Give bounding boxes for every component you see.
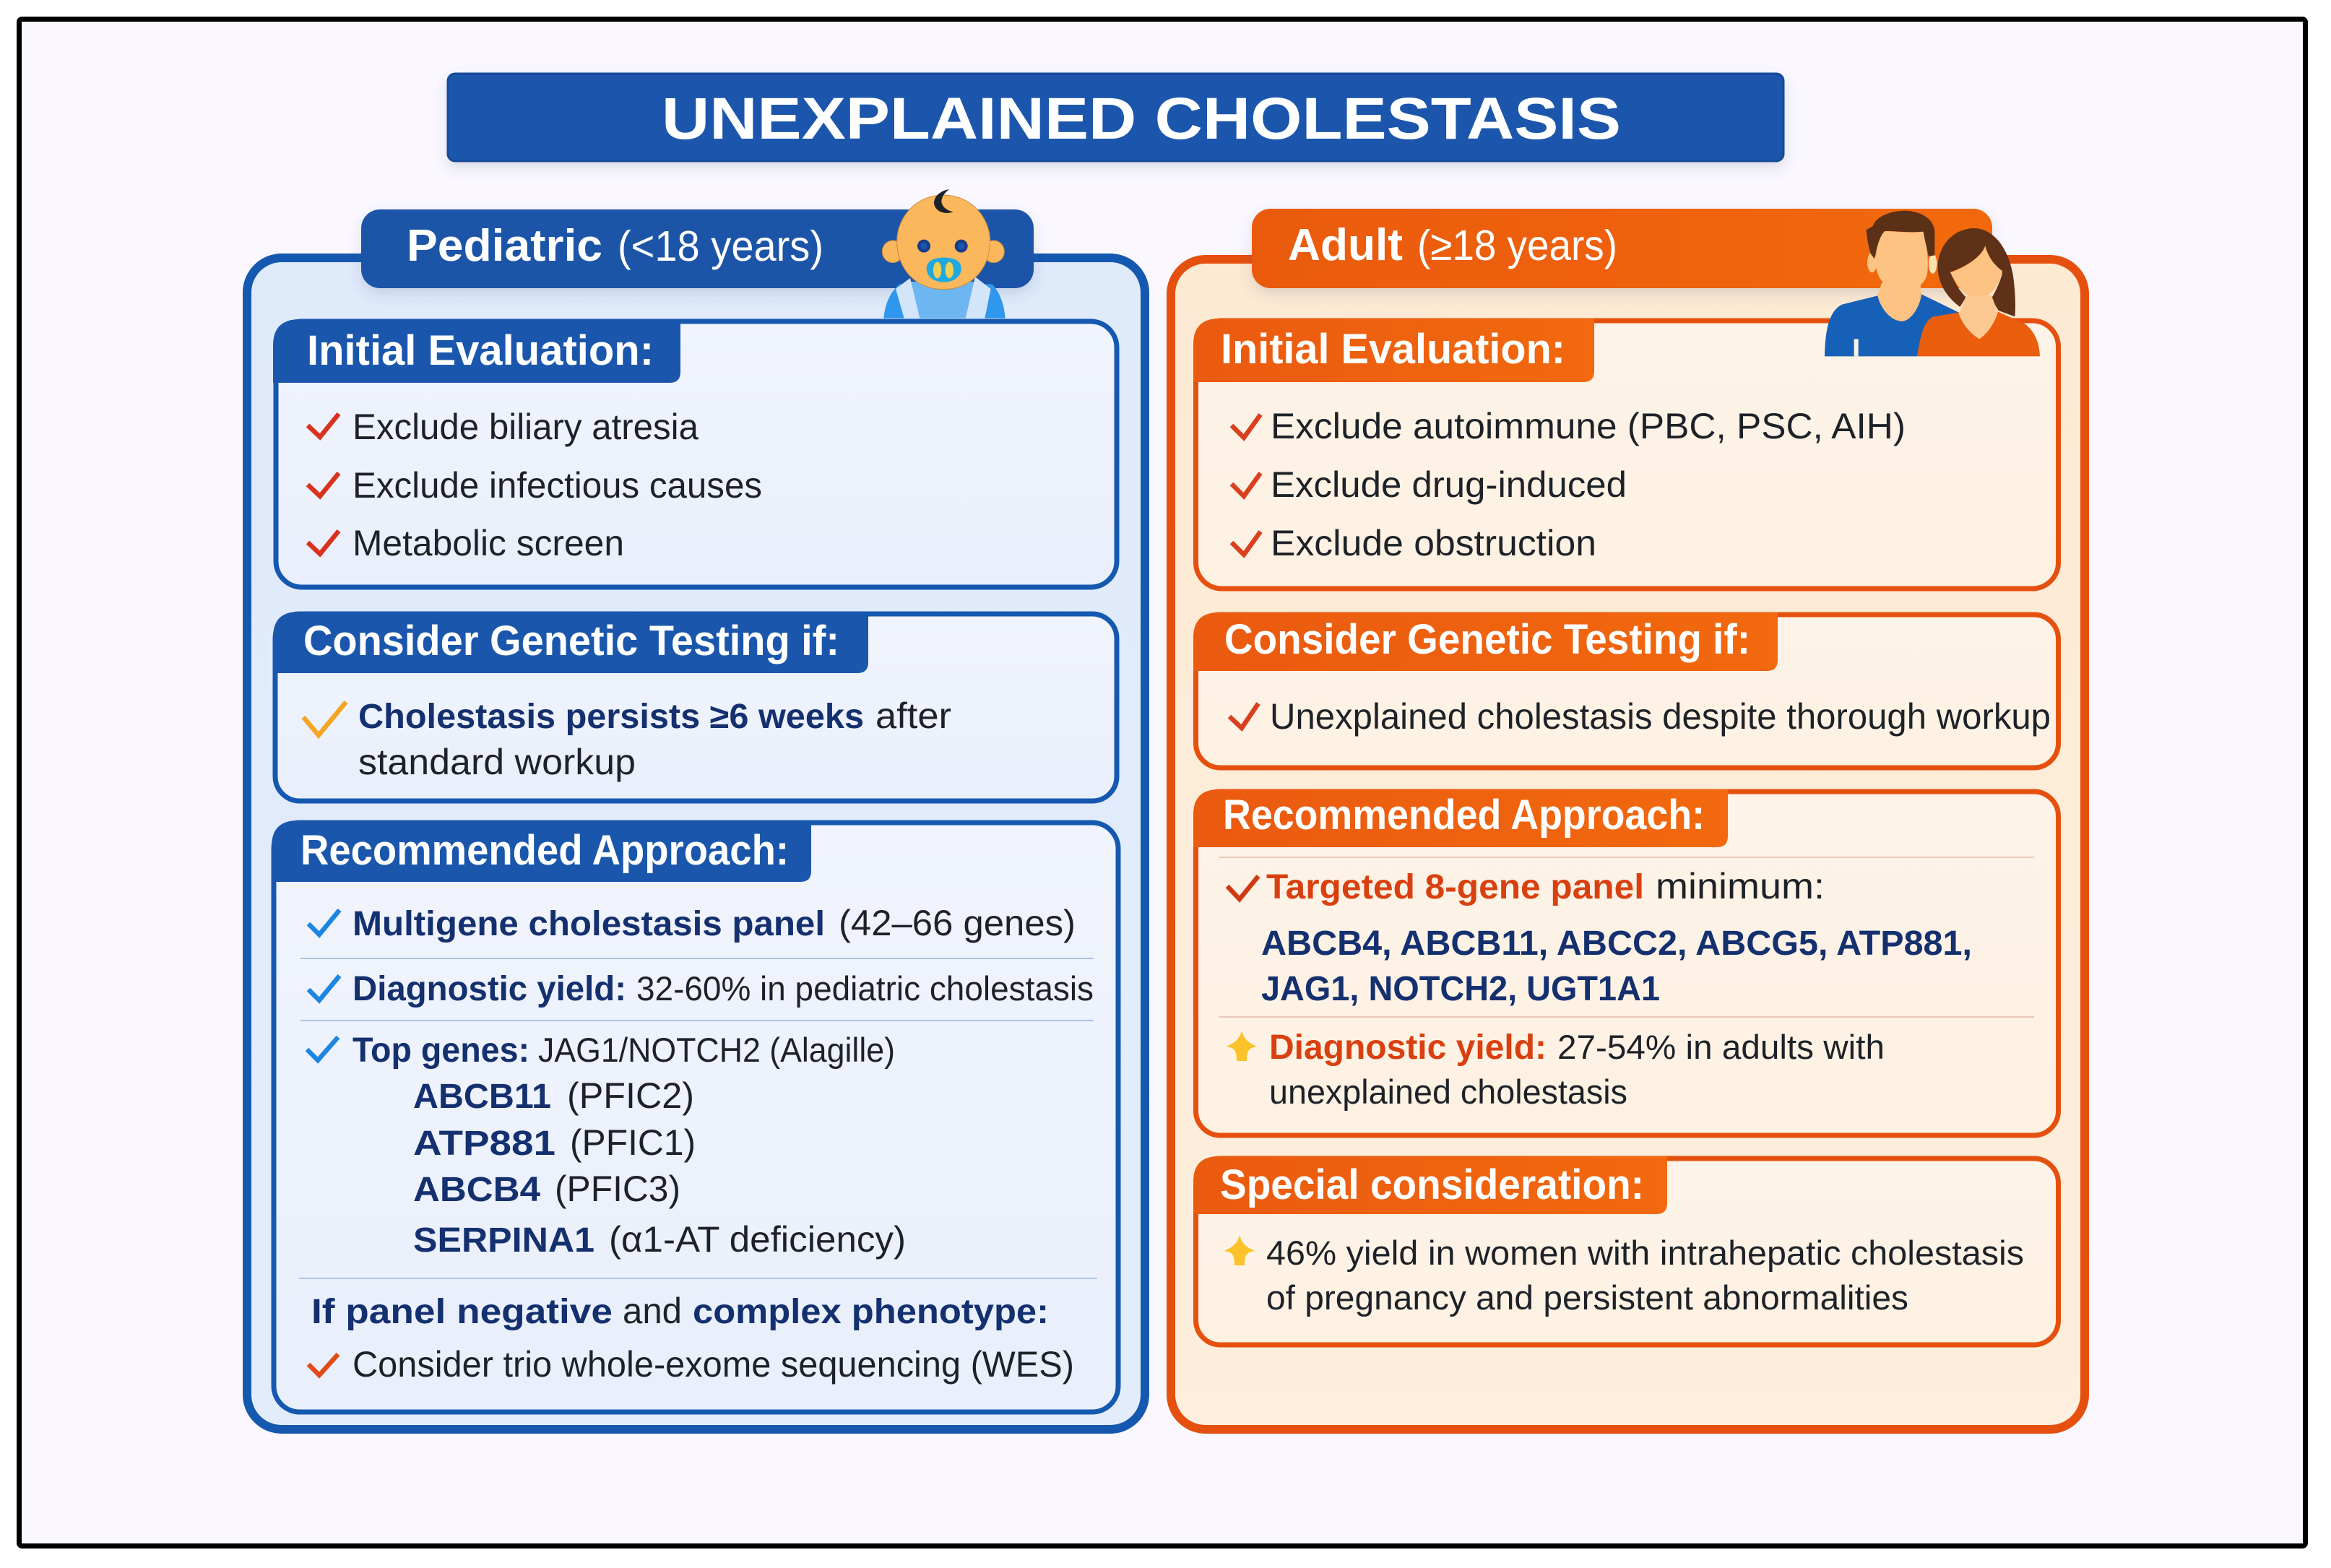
check [1232,532,1260,555]
yield line two: unexplained cholestasis [1269,1073,1627,1111]
title banner [448,74,1783,161]
check [307,1037,338,1060]
tab [1193,319,1594,382]
gene: ABCB4 [413,1171,540,1209]
condition phenotype: complex phenotype: [693,1293,1049,1331]
tab heading: Recommended Approach: [300,827,789,874]
criterion bold: Cholestasis persists ≥6 weeks [358,698,864,736]
item: Exclude biliary atresia [353,407,699,447]
panel label: Targeted 8-gene panel [1266,868,1644,906]
top genes label: Top genes: [353,1031,529,1070]
tab [273,612,868,673]
icon: baby [882,189,1006,319]
tab heading: Consider Genetic Testing if: [303,618,839,664]
gene list line two: JAG1, NOTCH2, UGT1A1 [1261,970,1660,1008]
adult box: initial evaluation [1193,319,2059,589]
disease: (PFIC3) [555,1169,680,1209]
title: UNEXPLAINED CHOLESTASIS [662,86,1621,152]
yield label: Diagnostic yield: [353,970,626,1008]
criterion line two: standard workup [358,742,636,782]
tab [272,820,811,882]
gene: ATP881 [413,1125,555,1163]
pediatric header [361,209,1034,288]
check [1229,703,1258,728]
yield value: 27-54% in adults with [1557,1028,1885,1066]
tab heading: Initial Evaluation: [1221,326,1565,373]
panel qualifier: minimum: [1656,866,1825,906]
item: Exclude infectious causes [353,465,762,506]
tab heading: Consider Genetic Testing if: [1224,616,1750,663]
adult box: consider genetic testing [1193,612,2059,768]
gene count: (42–66 genes) [839,903,1076,943]
item: Metabolic screen [353,523,624,563]
tab heading: Initial Evaluation: [307,327,654,374]
check [308,1354,338,1375]
check [1232,415,1260,438]
condition: If panel negative [311,1293,613,1331]
adult box: special consideration [1193,1156,2059,1345]
adult header [1252,209,1992,288]
adult box: recommended approach [1193,789,2059,1135]
panel: pediatric [247,189,1145,1429]
tab heading: Special consideration: [1220,1161,1644,1208]
pediatric heading: Pediatric [407,221,602,271]
tab [273,319,680,383]
pediatric box: recommended approach [272,820,1118,1412]
panel: adult [1171,209,2085,1429]
check [1232,473,1260,496]
item: Exclude obstruction [1271,523,1596,563]
yield label: Diagnostic yield: [1269,1028,1547,1067]
disease: (PFIC2) [567,1075,694,1116]
criterion: Unexplained cholestasis despite thorough workup [1270,696,2051,737]
check [303,702,346,735]
gene list line one: ABCB4, ABCB11, ABCC2, ABCG5, ATP881, [1261,924,1972,963]
gene: ABCB11 [413,1078,551,1116]
panel item: Multigene cholestasis panel [353,905,825,943]
pediatric box: initial evaluation [273,319,1117,587]
consideration line two: of pregnancy and persistent abnormalities [1266,1278,1908,1317]
icon: star [1224,1235,1255,1265]
adult heading: Adult [1288,220,1403,270]
tab [1193,1156,1667,1214]
disease: (α1-AT deficiency) [609,1219,906,1260]
icon: adults [1825,211,2040,356]
check [308,531,339,554]
check [308,976,340,1000]
pediatric age range: (<18 years) [618,222,823,270]
adult age range: (≥18 years) [1417,222,1617,269]
tab [1193,789,1728,847]
icon: star [1227,1031,1257,1061]
check [308,473,339,496]
check [308,910,340,935]
condition and: and [623,1291,682,1331]
gene: SERPINA1 [413,1221,594,1260]
top genes value: JAG1/NOTCH2 (Alagille) [538,1031,895,1069]
check [308,414,339,437]
tab [1193,612,1778,671]
wes: Consider trio whole-exome sequencing (WES) [353,1344,1074,1385]
tab heading: Recommended Approach: [1223,792,1705,839]
pediatric box: consider genetic testing [273,612,1117,801]
item: Exclude drug-induced [1271,464,1627,505]
item: Exclude autoimmune (PBC, PSC, AIH) [1271,406,1906,446]
criterion: after [875,696,951,736]
check [1227,876,1258,899]
yield value: 32-60% in pediatric cholestasis [636,969,1094,1008]
disease: (PFIC1) [570,1122,696,1163]
consideration line one: 46% yield in women with intrahepatic cholestasis [1266,1234,2024,1272]
